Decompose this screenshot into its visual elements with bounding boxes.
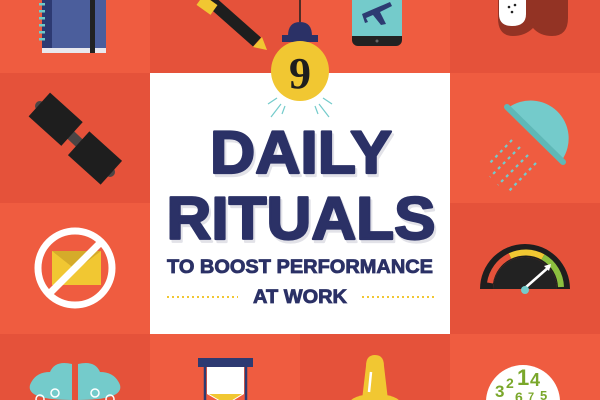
icon: dumbbell [29, 93, 122, 185]
icon: shower [488, 100, 569, 192]
icon: phone [352, 0, 402, 46]
icon: numbers circle [486, 365, 560, 400]
icon: gauge [480, 244, 570, 294]
subtitle: AT WORK [253, 287, 347, 308]
icon: notebook [39, 0, 106, 53]
title: DAILY RITUALS [166, 119, 437, 255]
subtitle [166, 257, 434, 308]
title: DAILY RITUALS: DAILY [212, 122, 394, 189]
icon: hourglass [198, 358, 253, 400]
icon: shoes [498, 0, 568, 36]
icon: numbers circle: 1 [517, 365, 529, 390]
icon: numbers circle: 2 [506, 375, 514, 391]
subtitle: TO BOOST PERFORMANCE [167, 257, 433, 278]
title: DAILY RITUALS: RITUALS [168, 188, 437, 255]
icon: pen [200, 0, 267, 50]
icon: brain [30, 363, 120, 400]
icon: bell [349, 355, 401, 400]
icon: light bulb with 9 [268, 0, 332, 118]
icon: no email [38, 231, 112, 305]
icon: light bulb with 9: 9 [289, 49, 311, 98]
title: DAILY RITUALS: DAILY [210, 119, 392, 186]
title panel [150, 73, 450, 334]
icon: numbers circle: 4 [530, 370, 540, 390]
title: DAILY RITUALS: RITUALS [166, 185, 435, 252]
